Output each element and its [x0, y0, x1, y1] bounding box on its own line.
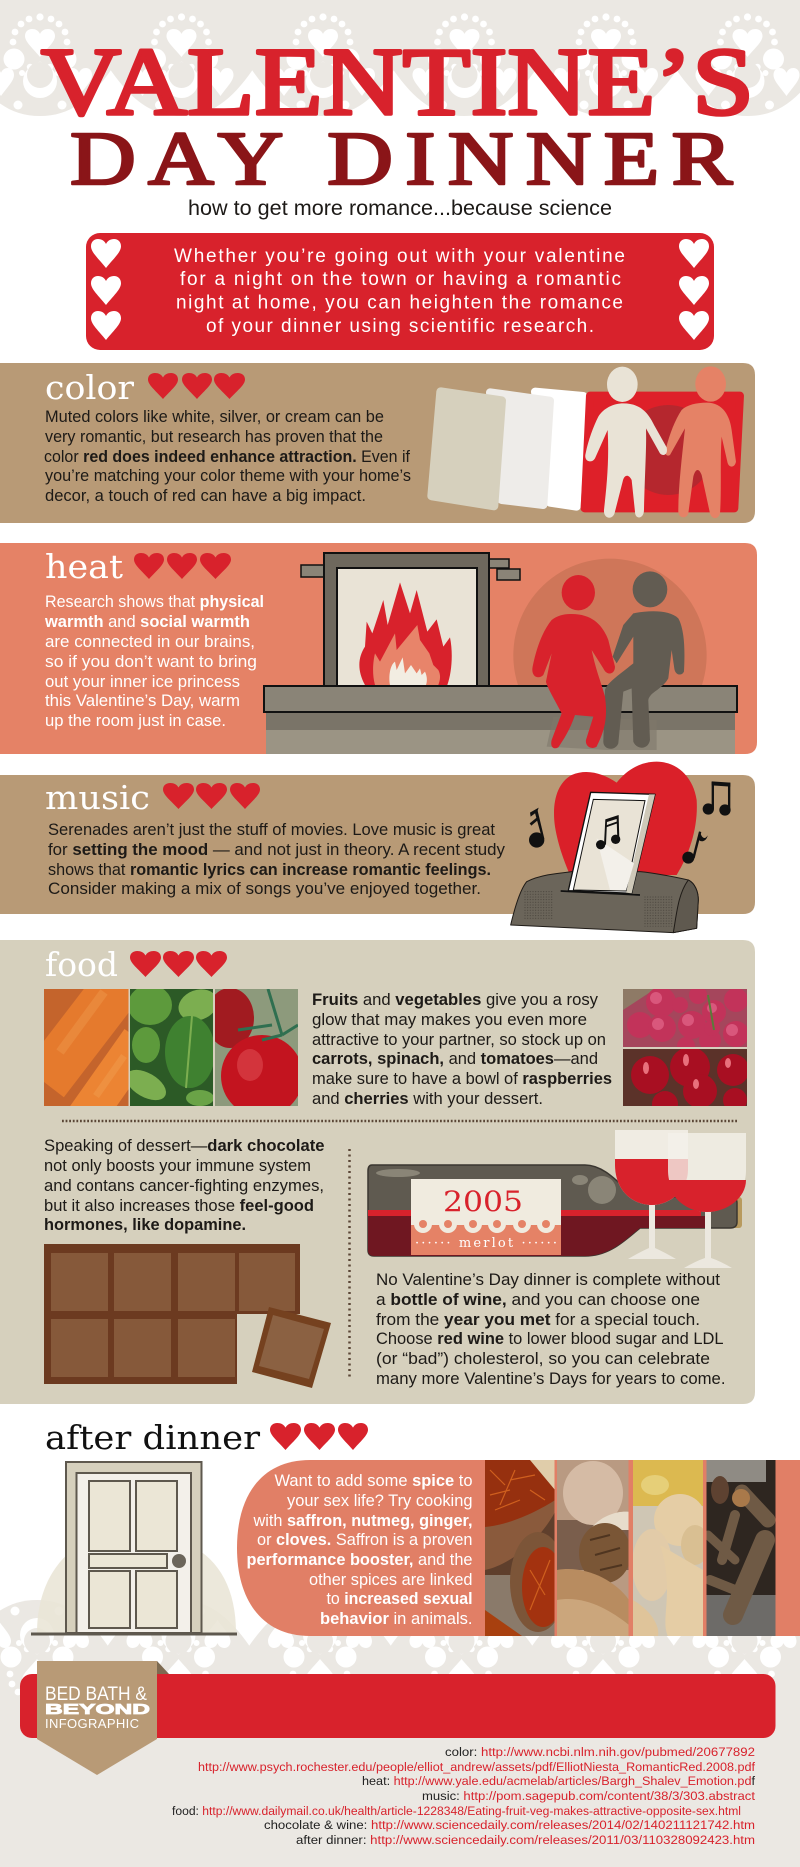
text: music: Serenades aren’t just the stuff of movies. Love music is great — [48, 821, 495, 839]
text: wine: many more Valentine’s Days for years to come. — [376, 1370, 726, 1388]
intro box: night at home, you can heighten the romance — [176, 292, 623, 314]
source references: chocolate & wine: http://www.sciencedaily.com/releases/2014/02/140211121742.htm — [264, 1818, 755, 1832]
text: fruits and vegetables: carrots, spinach, and tomatoes—and — [312, 1050, 598, 1068]
heading: after dinner: after dinner — [45, 1418, 260, 1457]
illustration: door — [31, 1462, 237, 1636]
photo: ginger — [632, 1460, 709, 1636]
photo: saffron — [485, 1460, 554, 1636]
source references: heat: http://www.yale.edu/acmelab/articles/Bargh_Shalev_Emotion.pd f — [362, 1774, 756, 1788]
title — [41, 28, 754, 201]
photo: raspberries — [623, 989, 747, 1047]
footer red bar — [20, 1674, 776, 1738]
text: heat: warmth and social warmth — [44, 613, 250, 631]
source references: music: http://pom.sagepub.com/content/38/3/303.abstract — [422, 1789, 756, 1803]
text: after dinner: or cloves. Saffron is a proven — [257, 1531, 472, 1549]
text: wine: a bottle of wine, and you can choose one — [376, 1291, 700, 1309]
text: heat: so if you don’t want to bring — [45, 653, 257, 671]
logo ribbon: INFOGRAPHIC — [45, 1716, 139, 1731]
text: heat: out your inner ice princess — [45, 673, 240, 691]
text: music: Consider making a mix of songs you’ve enjoyed together. — [48, 880, 481, 898]
source references: color: http://www.ncbi.nlm.nih.gov/pubmed/20677892 — [445, 1745, 755, 1759]
photo: carrots — [44, 989, 128, 1106]
text: after dinner: your sex life? Try cooking — [287, 1492, 472, 1510]
text: fruits and vegetables: attractive to your partner, so stock up on — [312, 1031, 606, 1049]
text: after dinner: to increased sexual — [326, 1590, 472, 1608]
text: fruits and vegetables: and cherries with your dessert. — [312, 1090, 543, 1108]
panel: food — [0, 940, 755, 1404]
text: wine: (or “bad”) cholesterol, so you can celebrate — [376, 1350, 710, 1368]
subtitle: how to get more romance...because science — [188, 197, 612, 220]
photo: cherries — [623, 1049, 747, 1106]
text: wine: from the year you met for a special touch. — [376, 1311, 700, 1329]
text: chocolate: Speaking of dessert—dark chocolate — [44, 1137, 324, 1155]
text: heat: are connected in our brains, — [45, 633, 255, 651]
text: music: shows that romantic lyrics can increase romantic feelings. — [48, 861, 491, 879]
heading: food: food — [45, 945, 118, 984]
text: chocolate: not only boosts your immune system — [44, 1157, 311, 1175]
source references — [172, 1745, 756, 1847]
photo: nutmeg — [557, 1460, 631, 1636]
illustration: swatches and couple — [432, 366, 740, 518]
text: color: very romantic, but research has proven that the — [45, 428, 383, 446]
text: fruits and vegetables: Fruits and vegetables give you a rosy — [312, 991, 599, 1009]
text: chocolate: and contans cancer-fighting enzymes, — [44, 1177, 324, 1195]
text: heat: Research shows that physical — [45, 593, 264, 611]
text: color — [44, 408, 411, 505]
text: color: you’re matching your color theme with your home’s — [45, 467, 411, 485]
title: DAY DINNER — [70, 117, 732, 201]
text: after dinner — [246, 1472, 472, 1628]
panel: after dinner — [237, 1460, 800, 1636]
text: chocolate: hormones, like dopamine. — [44, 1216, 246, 1234]
text: color: decor, a touch of red can have a big impact. — [45, 487, 366, 505]
source references: food: http://www.dailymail.co.uk/health/article-1228348/Eating-fruit-veg-makes-attractive-opposite-sex.html — [172, 1804, 741, 1818]
text: wine — [376, 1271, 726, 1388]
heading: color: color — [45, 368, 134, 407]
divider: dotted vertical — [348, 1149, 351, 1378]
text: wine: No Valentine’s Day dinner is complete without — [376, 1271, 720, 1289]
text: after dinner: behavior in animals. — [320, 1610, 472, 1628]
photo: tomatoes — [215, 989, 298, 1106]
text: fruits and vegetables: make sure to have a bowl of raspberries — [312, 1070, 612, 1088]
hearts: food — [130, 951, 227, 977]
illustration: couple by the fire — [513, 559, 707, 750]
text: after dinner: with saffron, nutmeg, ginger, — [253, 1512, 472, 1530]
text: after dinner: Want to add some spice to — [274, 1472, 472, 1490]
text: after dinner: performance booster, and the — [246, 1551, 472, 1569]
text: fruits and vegetables: glow that may makes you even more — [312, 1011, 587, 1029]
text: color: Muted colors like white, silver, or cream can be — [45, 408, 384, 426]
text: heat: this Valentine’s Day, warm — [45, 692, 240, 710]
hearts: after dinner — [270, 1423, 368, 1450]
text: chocolate — [44, 1137, 324, 1234]
text: wine: Choose red wine to lower blood sugar and LDL — [376, 1330, 724, 1348]
panel: music — [0, 762, 755, 933]
source references: after dinner: http://www.sciencedaily.com/releases/2011/03/110328092423.htm — [296, 1833, 755, 1847]
hearts: music — [163, 783, 260, 809]
text: color: color red does indeed enhance attraction. Even if — [44, 448, 410, 466]
divider: dotted horizontal — [62, 1120, 738, 1122]
illustration: fireplace — [264, 553, 737, 754]
text: fruits and vegetables — [312, 991, 612, 1108]
illustration: wine bottle — [368, 1165, 742, 1261]
text: chocolate: but it also increases those feel-good — [44, 1197, 314, 1215]
bottle label: 2005 — [443, 1185, 523, 1218]
logo ribbon — [37, 1661, 169, 1775]
illustration: wine glasses — [615, 1130, 746, 1268]
photo: spinach — [130, 989, 213, 1106]
photo: cloves — [706, 1460, 776, 1636]
intro box — [86, 233, 714, 350]
panel: color — [0, 363, 755, 523]
header lace band — [0, 0, 800, 116]
hearts: heat — [134, 553, 231, 579]
hearts: color — [148, 373, 245, 399]
text: heat: up the room just in case. — [45, 712, 226, 730]
intro box: of your dinner using scientific research. — [206, 316, 594, 337]
illustration: heart and music dock — [511, 762, 731, 933]
heading: music: music — [45, 778, 150, 817]
intro box: for a night on the town or having a romantic — [180, 269, 621, 290]
text: heat — [44, 593, 264, 730]
footer lace band — [0, 1600, 800, 1867]
bottle label: ······ merlot ······ — [415, 1236, 557, 1251]
panel: heat — [0, 543, 757, 754]
logo ribbon: BED BATH & — [45, 1684, 147, 1705]
logo ribbon: BEYOND — [45, 1701, 150, 1718]
source references: http://www.psych.rochester.edu/people/elliot_andrew/assets/pdf/ElliotNiesta_RomanticRed.2008.pdf — [198, 1760, 756, 1774]
text: music — [48, 821, 506, 898]
heading: heat: heat — [45, 547, 123, 586]
intro box: Whether you’re going out with your valentine — [174, 246, 625, 267]
text: after dinner: other spices are linked — [309, 1571, 472, 1589]
title: VALENTINE’S — [41, 28, 754, 135]
bottle label — [411, 1179, 561, 1255]
illustration: chocolate bar — [44, 1244, 331, 1388]
text: music: for setting the mood — and not just in theory. A recent study — [48, 841, 506, 859]
